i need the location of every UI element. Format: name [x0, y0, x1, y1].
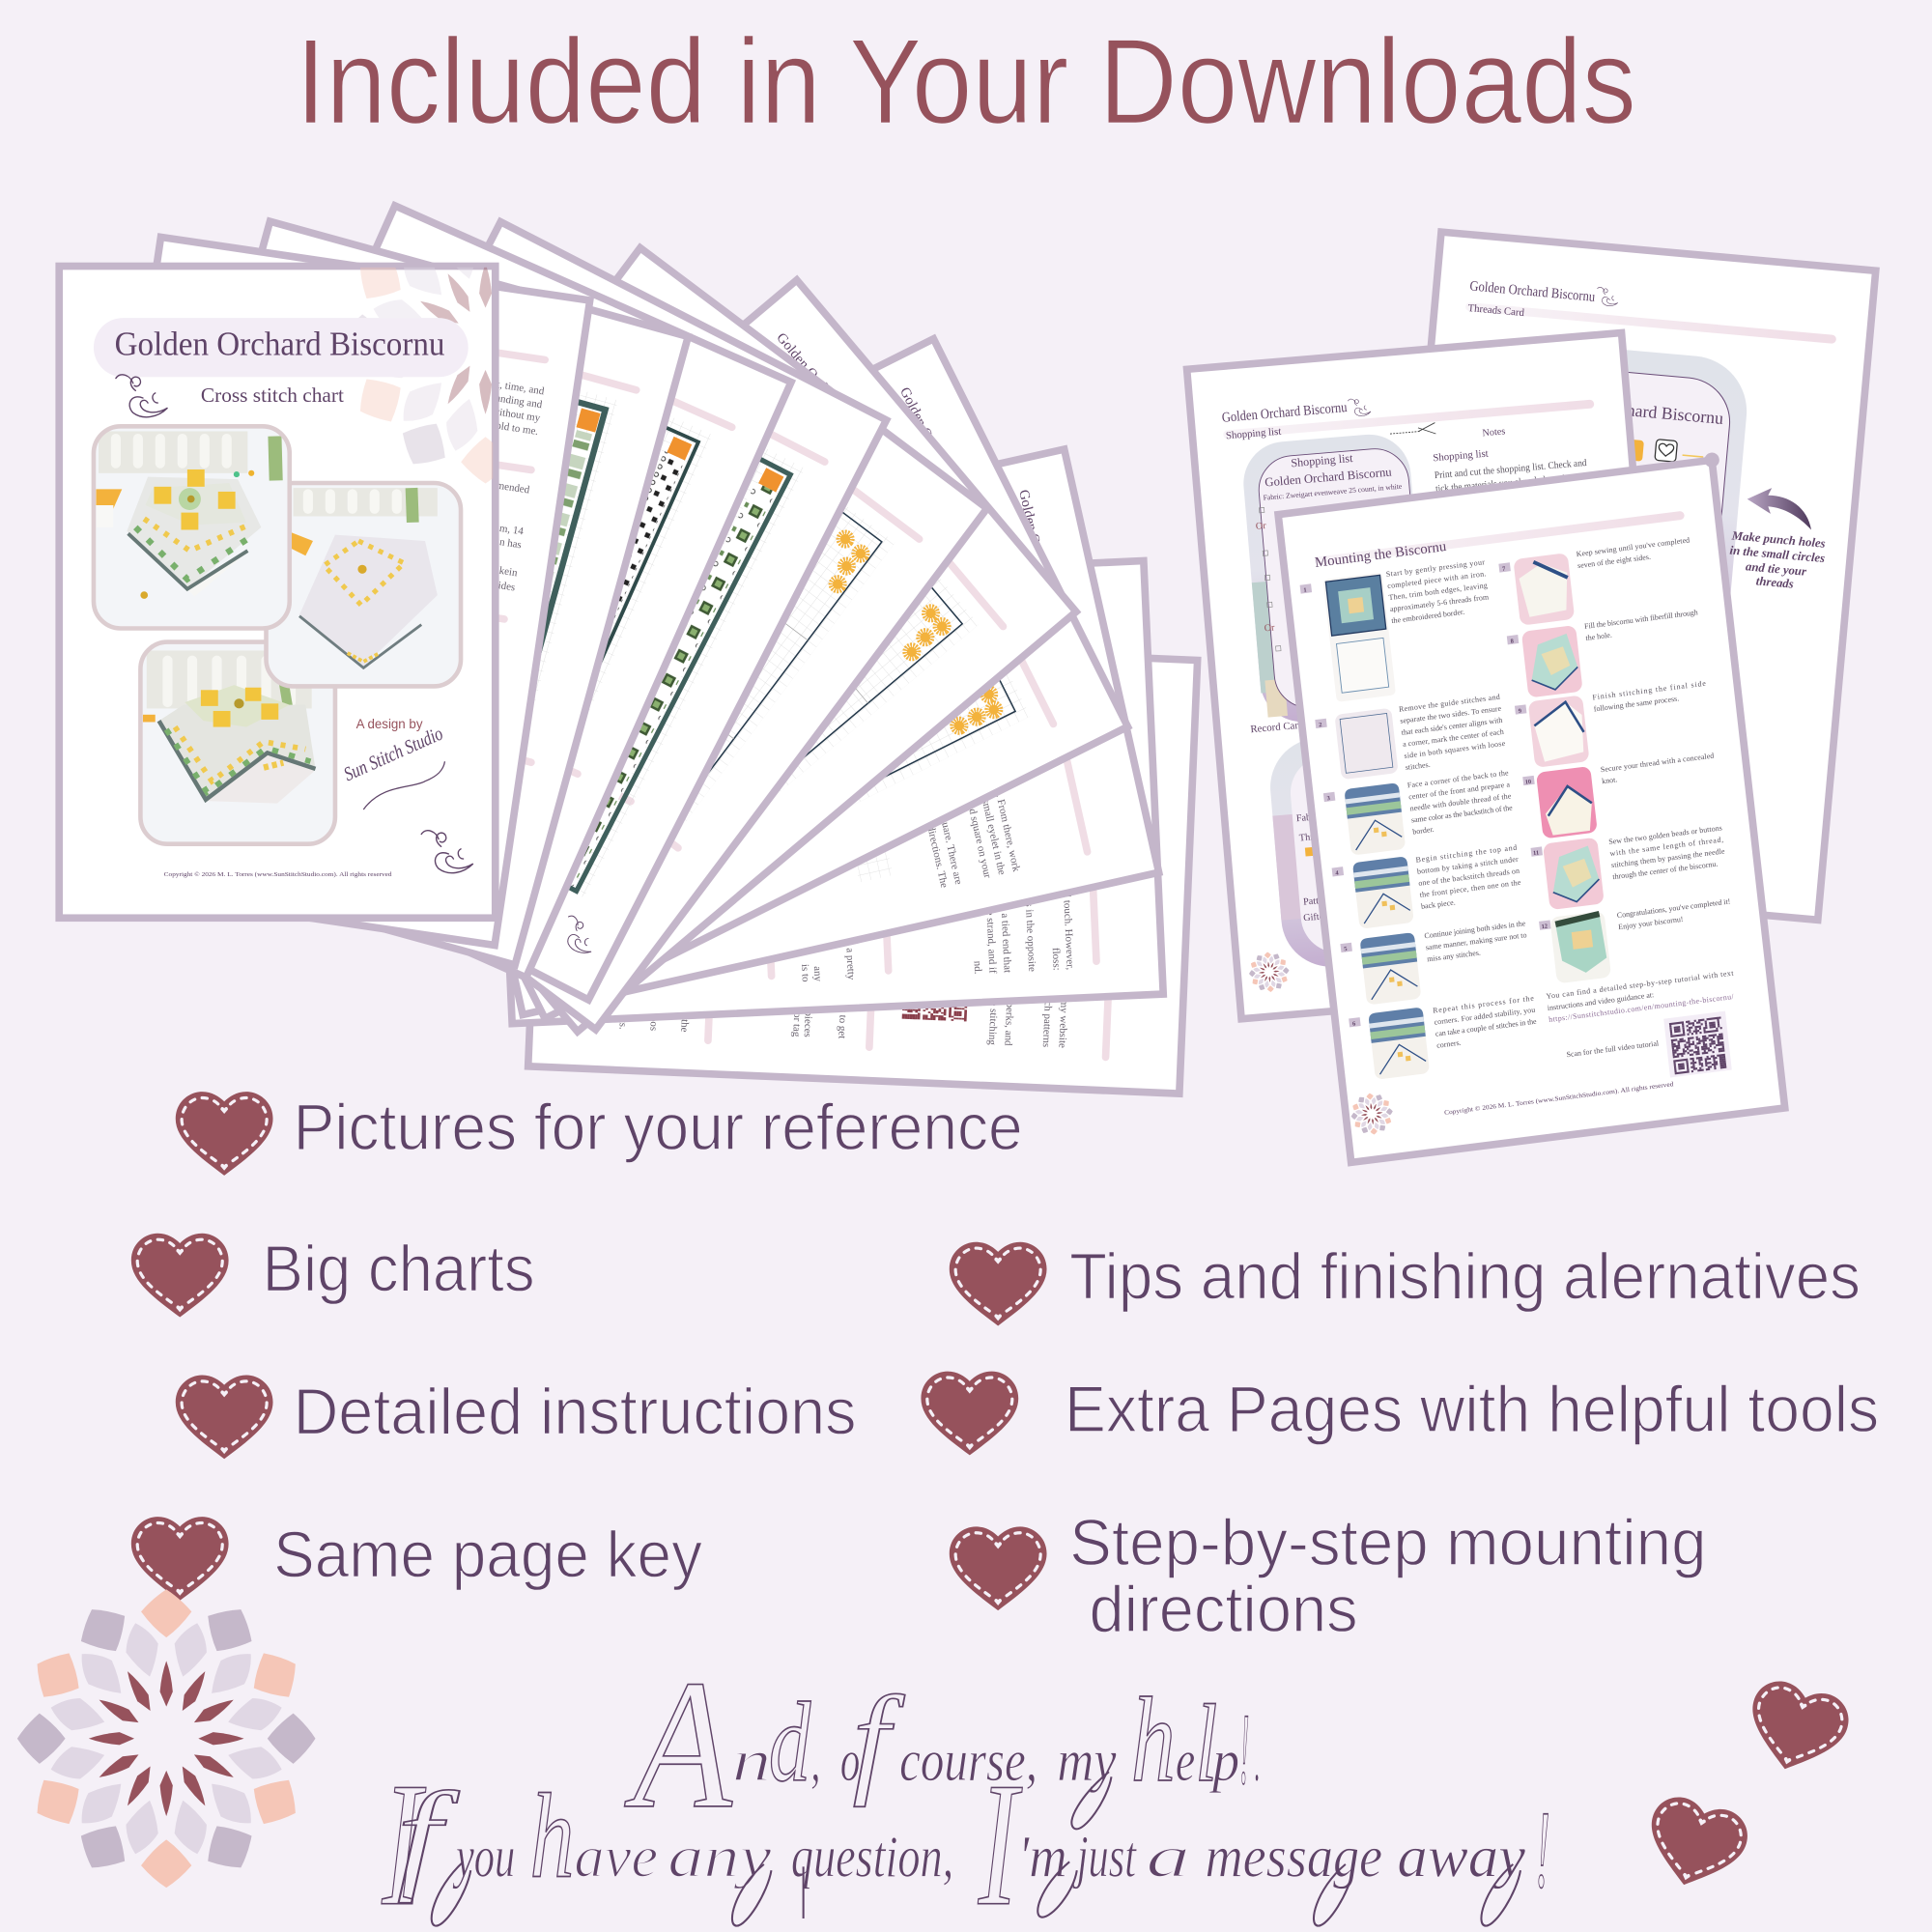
record card: Patt: [1303, 895, 1320, 908]
qr code: [1663, 1011, 1732, 1078]
step 3: center of the front and prepare a: [1408, 780, 1511, 801]
page 1: mended: [496, 480, 530, 497]
step 3: [1323, 768, 1516, 858]
shopping list page: Print and cut the shopping list. Check and: [1434, 458, 1587, 481]
icon: swirl: [1348, 397, 1371, 417]
notes heading: Notes: [1482, 426, 1506, 439]
threads card: [1482, 340, 1751, 726]
script line 1: n: [732, 1728, 771, 1794]
shopping card: Golden Orchard Biscornu: [1264, 465, 1393, 490]
script line 1: o: [840, 1728, 860, 1794]
page 1: skein: [495, 564, 519, 579]
shopping card: [1240, 431, 1431, 725]
step 6: corners.: [1436, 1038, 1462, 1050]
page 1: m, 14: [498, 523, 525, 538]
threads bar: [1465, 302, 1836, 344]
step 2: stitches.: [1405, 760, 1431, 772]
page 8: square. There are: [937, 812, 964, 886]
step 3: border.: [1412, 825, 1435, 837]
icon: heart: [176, 1092, 273, 1176]
feature: Step-by-step mounting: [1069, 1507, 1707, 1579]
step 6: [1349, 993, 1541, 1082]
step 11: Sew the two golden beads or buttons: [1608, 823, 1722, 846]
tutorial note: https://Sunstitchstudio.com/en/mounting-the-biscornu/: [1548, 992, 1735, 1024]
script line 1: my: [1057, 1728, 1117, 1794]
step 6: 6: [1352, 1020, 1356, 1028]
step 3: same color as the backstitch of the: [1410, 803, 1514, 825]
page 9: is to: [799, 964, 811, 982]
arrow: [1747, 488, 1811, 529]
step 3: needle with double thread of the: [1409, 791, 1512, 812]
cover page: [55, 263, 499, 922]
script line 1: A: [624, 1643, 733, 1847]
script line 2: 'm: [1018, 1825, 1067, 1890]
page 1: old to me.: [496, 420, 539, 438]
step 4: [1331, 842, 1524, 932]
script line 2: [382, 1746, 1550, 1932]
page 7: [351, 339, 1127, 1018]
feature list left: [131, 1092, 1023, 1601]
feature: Detailed instructions: [294, 1377, 856, 1449]
step 12: 12: [1541, 923, 1548, 930]
page 8: Golden Orchard Biscornu: [1015, 488, 1063, 635]
subheading: Threads Card: [1467, 302, 1525, 319]
step 2: a corner, mark the center of each: [1403, 727, 1504, 749]
shopping card: Fabric: Zweigart evenweave 25 count, in white: [1263, 482, 1403, 502]
script line 1: p: [1208, 1728, 1239, 1794]
step 6: can take a couple of stitches in the: [1435, 1017, 1537, 1038]
page 10: ue stitching: [986, 996, 1000, 1046]
step 11: through the center of the biscornu.: [1612, 860, 1719, 881]
shopping card: Or: [1264, 622, 1276, 634]
page 9: floss:: [1050, 948, 1063, 971]
photo top: [94, 426, 290, 629]
page 8: re. From there, work: [992, 785, 1022, 873]
step 8: 8: [1510, 638, 1514, 645]
page 1: anding and: [495, 392, 544, 411]
icon: swirl: [1596, 287, 1619, 306]
page 8: directions. The: [924, 825, 950, 889]
step 9: [1515, 679, 1714, 770]
shopping list page: [1187, 333, 1676, 1019]
page 9: al touch. However,: [1061, 890, 1076, 971]
tutorial note: You can find a detailed step-by-step tutorial with text: [1546, 969, 1735, 1001]
step 2: [1315, 693, 1507, 782]
designer credit: Sun Stitch Studio: [341, 724, 446, 785]
mandala logo: [1247, 951, 1291, 994]
script line 1: l: [1195, 1682, 1217, 1804]
icon: heart: [921, 1372, 1018, 1455]
script line 2: h: [529, 1771, 574, 1904]
shopping list page: Shopping list: [1433, 448, 1489, 464]
page 10: the: [678, 1019, 691, 1033]
page 9: [493, 561, 1163, 1024]
page 10: ks.: [616, 1017, 629, 1030]
step 9: 9: [1518, 708, 1521, 715]
record card: Fab: [1295, 812, 1312, 824]
step 2: 2: [1319, 722, 1322, 728]
icon: heart: [1637, 1791, 1753, 1898]
page 1: n has: [498, 536, 523, 551]
cover subtitle: Cross stitch chart: [201, 384, 344, 407]
feature: Same page key: [273, 1520, 702, 1592]
step 2: separate the two sides. To ensure: [1400, 704, 1502, 725]
scissors: [1389, 423, 1435, 438]
page 2: [97, 221, 688, 965]
step 7: Keep sewing until you've completed: [1576, 535, 1690, 558]
step 1: 1: [1303, 587, 1307, 594]
icon: heart: [1738, 1675, 1855, 1782]
shopping bar: [1223, 400, 1595, 440]
feature: Tips and finishing alernatives: [1069, 1240, 1861, 1313]
step 4: bottom by taking a stitch under: [1416, 855, 1519, 876]
step 4: back piece.: [1421, 898, 1456, 911]
fan of preview pages: [66, 206, 1198, 1094]
step 5: 5: [1344, 946, 1348, 952]
step 11: stitching them by passing the needle: [1611, 846, 1725, 869]
step 1: approximately 5-6 threads from: [1389, 592, 1490, 613]
step 1: [1299, 557, 1499, 705]
script message: [382, 1643, 1550, 1932]
feature: Pictures for your reference: [294, 1092, 1023, 1164]
handwritten note: Make punch holes: [1730, 528, 1826, 551]
step 3: 3: [1326, 795, 1330, 802]
step 8: Fill the biscornu with fiberfill through: [1584, 608, 1698, 631]
copyright: Copyright © 2026 M. L. Torres (www.SunStitchStudio.com). All rights reserved: [1444, 1081, 1675, 1117]
step 10: [1522, 751, 1720, 840]
page 8: nd square on your: [965, 803, 993, 879]
cover title pill: Golden Orchard Biscornu: [115, 326, 444, 362]
heading: Golden Orchard Biscornu: [1221, 400, 1349, 426]
step 5: Continue joining both sides in the: [1424, 919, 1526, 940]
handwritten note: in the small circles: [1729, 544, 1826, 565]
page 10: epieces: [802, 1006, 814, 1037]
step 7: 7: [1502, 565, 1507, 573]
step 2: side in both squares with loose: [1404, 739, 1506, 760]
feature: Big charts: [263, 1234, 535, 1306]
notes: n the marked: [1693, 794, 1749, 810]
feature: Extra Pages with helpful tools: [1065, 1374, 1879, 1446]
page 4: [203, 222, 887, 1000]
record card: [1266, 725, 1482, 971]
script line 2: you: [452, 1825, 515, 1890]
step 10: 10: [1524, 779, 1532, 786]
page 10: stitch patterns: [1040, 988, 1054, 1047]
page 10: to or tag: [790, 1002, 804, 1037]
record card label: Record Card: [1250, 720, 1304, 735]
text: !: [1535, 1788, 1550, 1911]
script line 2: just: [1072, 1825, 1137, 1890]
step 3: Face a corner of the back to the: [1406, 768, 1509, 789]
page 1: without my: [492, 406, 541, 424]
icon: heart: [950, 1526, 1047, 1610]
tutorial note: instructions and video guidance at:: [1547, 990, 1655, 1012]
handwritten note: threads: [1755, 574, 1794, 591]
icon: heart: [950, 1242, 1047, 1325]
script flourishes: [432, 1772, 1520, 1926]
subheading: Shopping list: [1225, 426, 1282, 441]
page 1: [66, 237, 590, 946]
page 9: any: [811, 966, 824, 982]
threads card: Golden Orchard Biscornu: [1546, 393, 1724, 428]
title: Included in Your Downloads: [296, 15, 1636, 150]
step 8: [1506, 608, 1705, 699]
step 2: that each side's center aligns with: [1401, 716, 1503, 737]
record card: Thr: [1298, 832, 1315, 843]
step 12: Enjoy your biscornu!: [1618, 915, 1684, 931]
page 1: ides: [497, 580, 516, 593]
step 10: knot.: [1602, 775, 1618, 785]
icon: heart: [131, 1234, 229, 1318]
page 3: [129, 206, 791, 978]
photo bottom: [140, 642, 335, 844]
page 5: Golden Orchard Biscornu: [631, 299, 757, 400]
step 8: the hole.: [1585, 631, 1612, 642]
page 9: es in the opposite: [1023, 897, 1037, 972]
page 6: [298, 280, 1076, 1032]
step 1: Then, trim both edges, leaving: [1388, 581, 1488, 602]
feature: directions: [1090, 1574, 1358, 1646]
shopping card: Shopping list: [1291, 451, 1354, 469]
page 9: a tied end that: [999, 913, 1013, 973]
page 10: my website: [1056, 999, 1070, 1048]
step 4: 4: [1335, 869, 1340, 877]
script line 2: any: [668, 1825, 772, 1890]
page 10: we perks, and: [1002, 987, 1016, 1046]
script line 2: ave: [574, 1825, 658, 1890]
script line 2: a: [1146, 1825, 1190, 1890]
page 8: small eyelet in the: [980, 798, 1008, 876]
script line 1: course,: [899, 1728, 1037, 1794]
threads card page: [1383, 232, 1876, 920]
record card: Gifte: [1303, 912, 1324, 923]
page 9: a pretty: [843, 948, 857, 980]
page 9: nd.: [972, 960, 983, 975]
script line 1: !: [1239, 1693, 1249, 1805]
page 5: [249, 248, 987, 1030]
heading bar: [1314, 511, 1685, 566]
mounting the biscornu page: [1277, 452, 1792, 1162]
icon: swirl: [1696, 853, 1738, 888]
step 12: [1539, 895, 1737, 985]
script line 2: f: [397, 1767, 461, 1904]
step 2: Remove the guide stitches and: [1399, 693, 1500, 714]
mandala logo: [1349, 1091, 1395, 1137]
copyright: Copyright © 2026 M. L. Torres (www.SunStitchStudio.com). All rights reserved: [164, 871, 392, 878]
heading: Golden Orchard Biscornu: [1469, 278, 1596, 305]
step 5: miss any stitches.: [1427, 949, 1481, 963]
page 10: gy to get: [836, 1002, 849, 1039]
script line 1: d: [769, 1680, 811, 1805]
shopping card: Or: [1255, 521, 1267, 532]
tutorial note: [1546, 969, 1737, 1024]
step 5: same manner, making sure not to: [1425, 930, 1527, 952]
step 11: with the same length of thread,: [1609, 835, 1724, 858]
page 10: [528, 633, 1198, 1094]
designer credit: [341, 716, 446, 810]
script line 2: message: [1205, 1825, 1382, 1890]
script line 1: e: [1176, 1728, 1195, 1794]
script line 1: f: [853, 1670, 906, 1807]
step 6: corners. For added stability, you: [1434, 1006, 1536, 1027]
cover mandala watermark: [359, 267, 493, 483]
script line 1: ,: [810, 1728, 820, 1794]
step 11: [1530, 821, 1729, 912]
threads card page: e a space for: [1696, 809, 1751, 825]
step 1: the embroidered border.: [1391, 608, 1465, 625]
photo right: [267, 483, 461, 686]
icon: swirl: [116, 375, 167, 417]
step 9: following the same process.: [1593, 694, 1680, 713]
step 11: 11: [1533, 849, 1540, 857]
step 4: the front piece, then one on the: [1419, 878, 1521, 899]
step 1: Start by gently pressing your: [1385, 557, 1486, 579]
step 5: [1340, 919, 1533, 1008]
scan caption: Scan for the full video tutorial: [1566, 1038, 1660, 1059]
step 10: Secure your thread with a concealed: [1600, 752, 1715, 774]
page 8: [428, 449, 1159, 1014]
step 7: [1498, 535, 1697, 628]
icon: heart: [131, 1517, 229, 1601]
script message: .: [1254, 1728, 1261, 1794]
page 6: Golden Orchard Biscornu: [773, 330, 880, 452]
handwritten note: and tie your: [1746, 559, 1808, 579]
handwritten note: [1726, 528, 1827, 593]
script line 2: away: [1397, 1825, 1526, 1890]
step 4: Begin stitching the top and: [1415, 843, 1518, 865]
script line 1: [624, 1643, 1261, 1847]
cover title pill: [94, 318, 469, 377]
heading: Mounting the Biscornu: [1314, 539, 1448, 571]
page 9: e strand, and if: [984, 910, 999, 974]
step 12: Congratulations, you've completed it!: [1616, 896, 1731, 920]
step 7: seven of the eight sides.: [1577, 553, 1651, 570]
page 1: t, time, and: [497, 379, 546, 397]
step 6: Repeat this process for the: [1433, 994, 1535, 1015]
feature: [1069, 1507, 1707, 1646]
step 4: one of the backstitch threads on: [1418, 867, 1520, 888]
script line 2: question,: [791, 1825, 953, 1890]
step 1: completed piece with an iron.: [1387, 569, 1487, 590]
feature list right: [921, 1240, 1879, 1646]
icon: heart: [176, 1375, 273, 1459]
shopping list page: tick the materials you already have in your: [1435, 471, 1589, 495]
script line 1: h: [1131, 1674, 1176, 1807]
page 10: boos: [647, 1010, 660, 1031]
mandala: [17, 1589, 316, 1888]
page 7: Golden Orchard Biscornu: [896, 384, 976, 524]
designer credit: A design by: [356, 716, 422, 731]
step 9: Finish stitching the final side: [1592, 679, 1707, 701]
icon: swirl: [421, 831, 473, 873]
